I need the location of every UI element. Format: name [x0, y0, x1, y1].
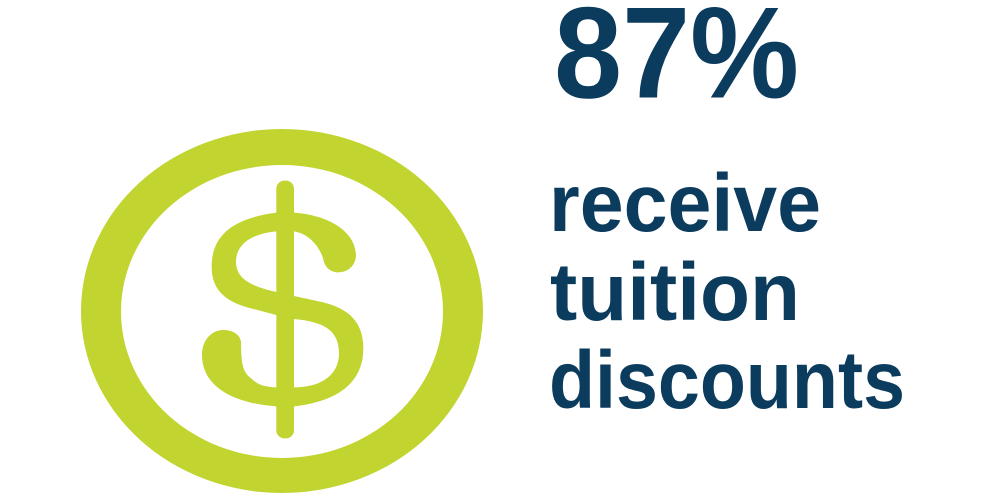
coin ring — [81, 129, 483, 493]
line: receive: receive — [549, 158, 821, 249]
line: discounts: discounts — [549, 335, 905, 426]
icon: dollar coin — [81, 129, 483, 493]
text block: receive tuition discounts — [549, 158, 905, 426]
dollar sign — [202, 181, 363, 438]
line: tuition: tuition — [550, 247, 800, 338]
